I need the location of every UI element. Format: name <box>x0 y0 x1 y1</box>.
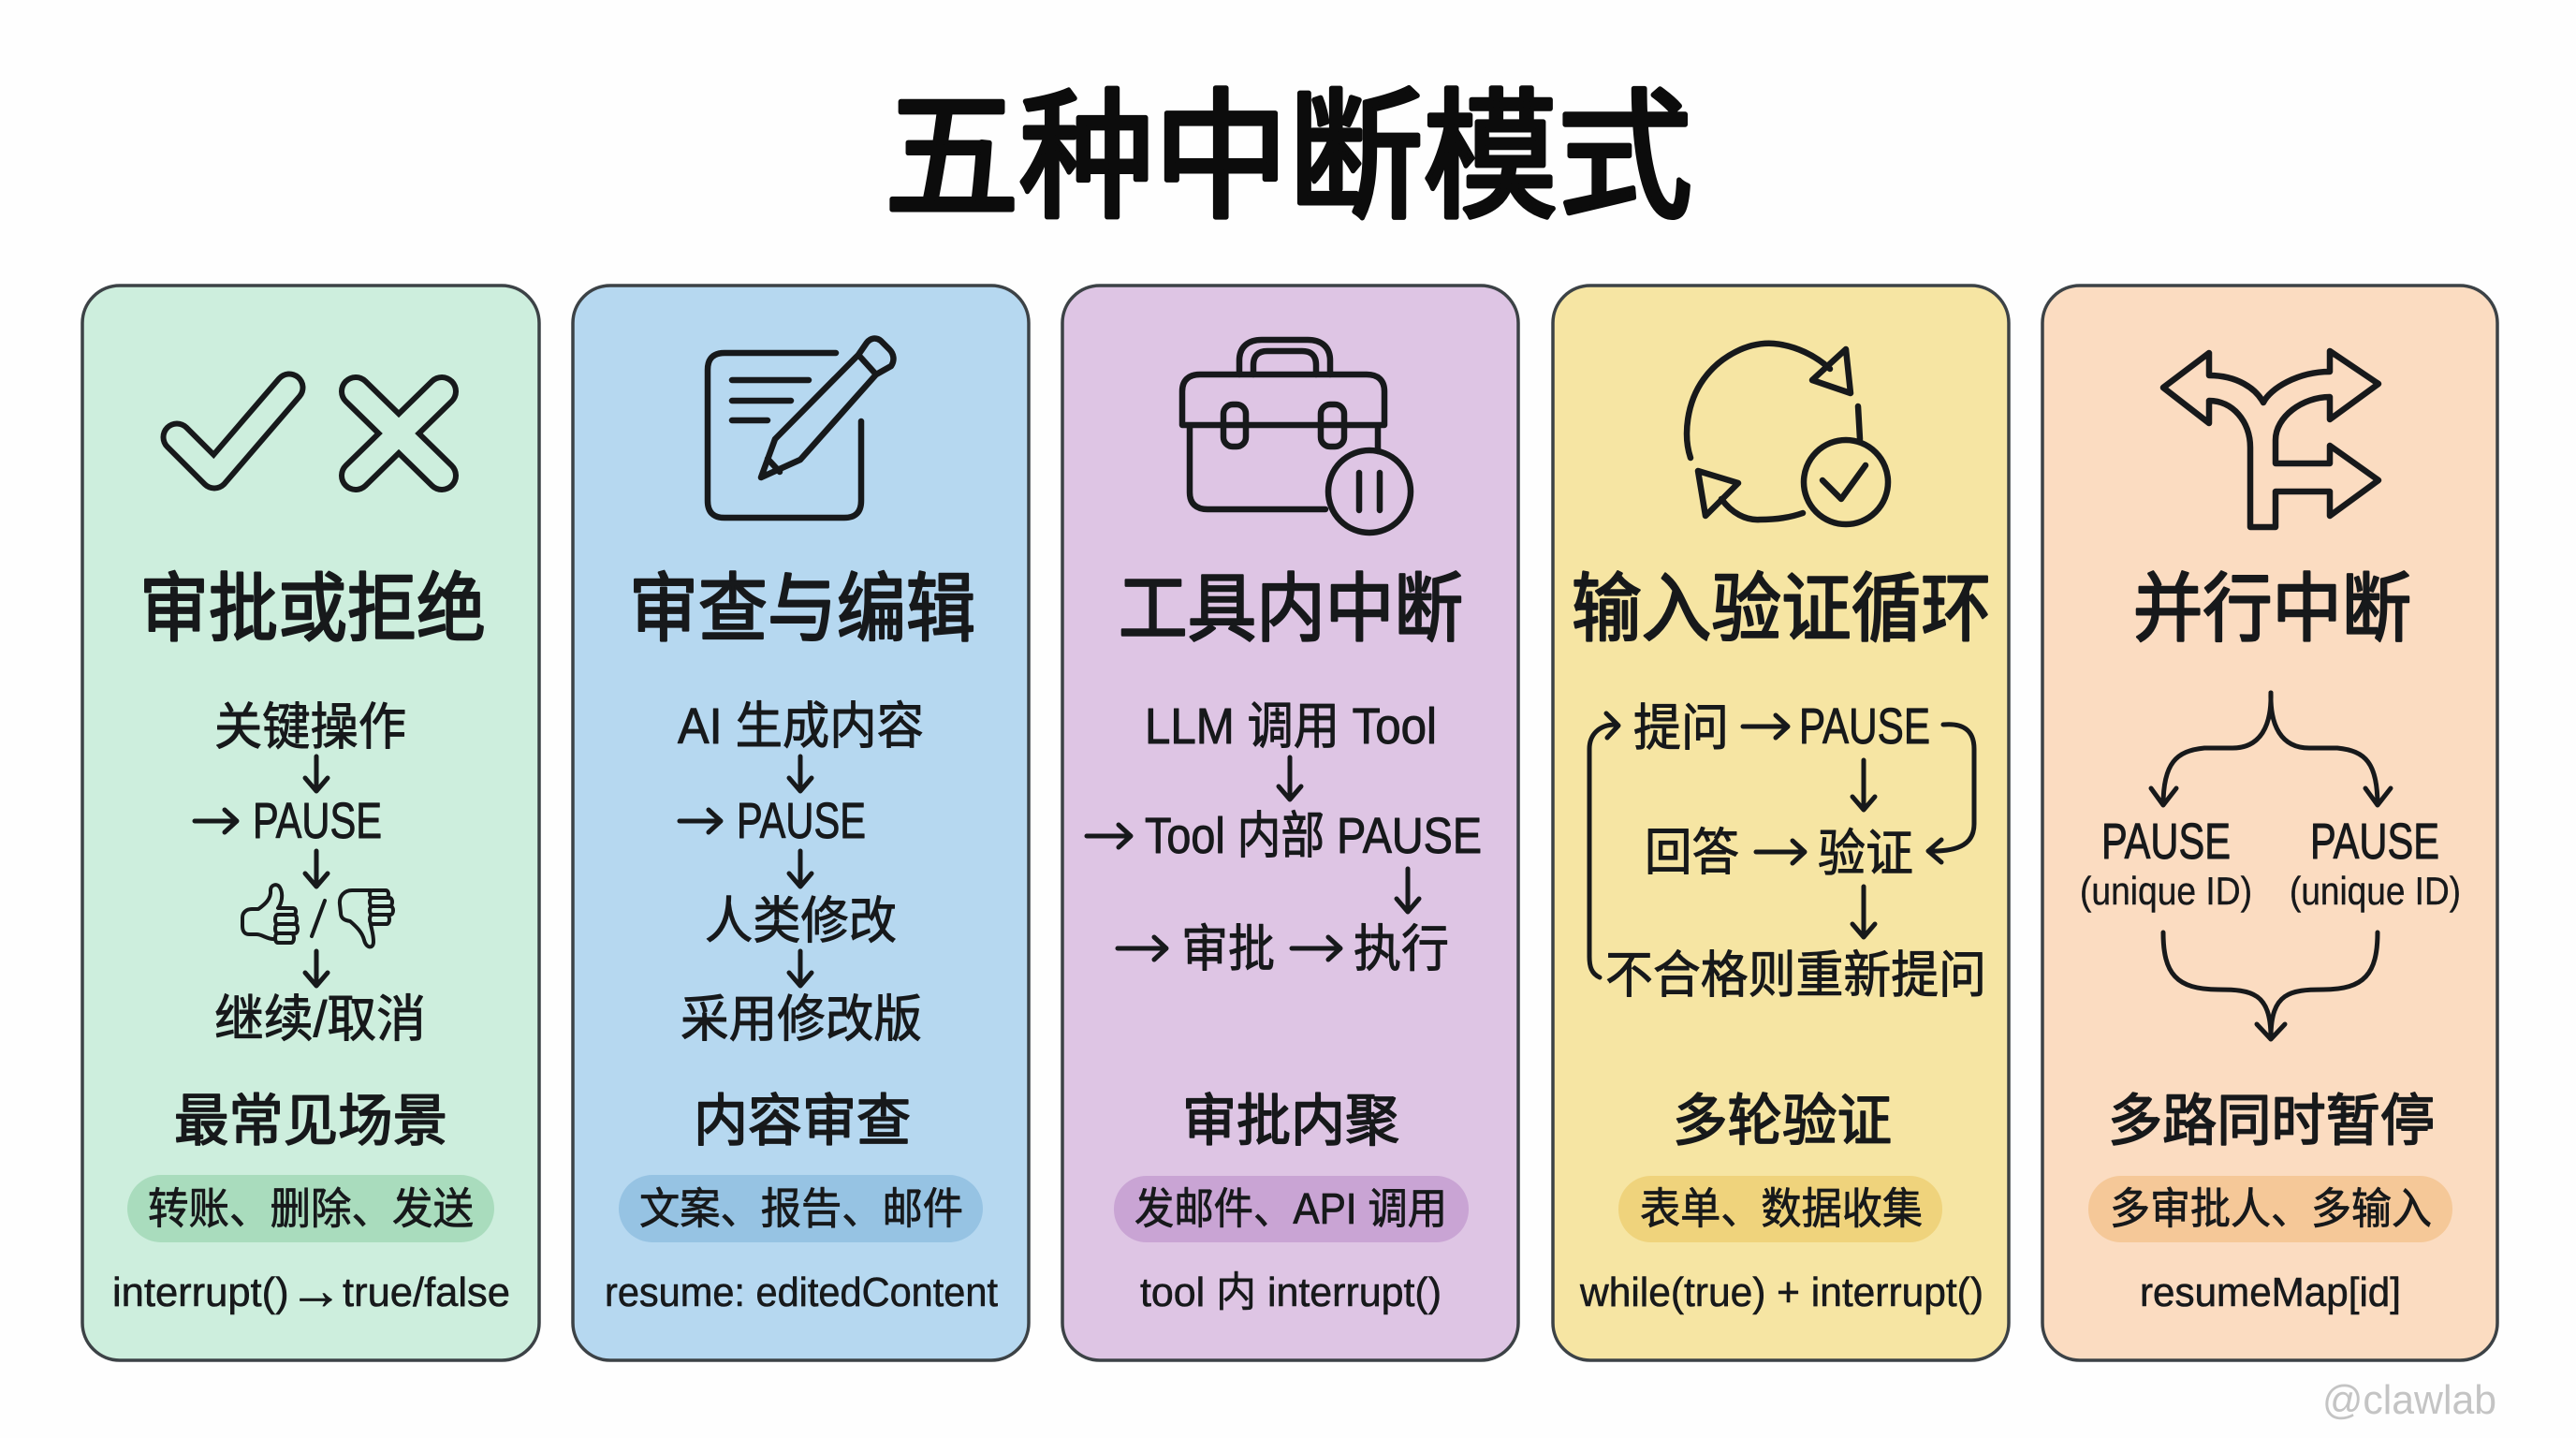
flow: review steps: 采用修改版 <box>681 991 922 1048</box>
flow: tool steps <box>1087 698 1482 977</box>
subheading: 多轮验证 <box>1673 1090 1892 1152</box>
flow: parallel diagram: (unique ID) <box>2080 869 2252 913</box>
flow: loop steps: 提问 <box>1633 700 1729 756</box>
flow: parallel diagram: PAUSE <box>2101 814 2231 870</box>
pill <box>127 1175 494 1242</box>
flow: parallel diagram: (unique ID) <box>2290 869 2461 913</box>
panel: validation loop <box>1553 286 2009 1360</box>
flow: review steps: PAUSE <box>737 793 866 849</box>
pill: 表单、数据收集 <box>1640 1184 1923 1233</box>
flow: tool steps: 审批 <box>1181 921 1275 977</box>
flow: review steps: AI 生成内容 <box>678 698 924 755</box>
flow: tool steps: 执行 <box>1354 921 1449 977</box>
flow: approve steps: 继续/取消 <box>214 991 426 1048</box>
subheading: 内容审查 <box>694 1090 911 1152</box>
flow: approve steps <box>195 699 426 1048</box>
icon: document and pencil <box>708 339 893 518</box>
code: tool 内 interrupt() <box>1140 1269 1442 1315</box>
heading: 审批或拒绝 <box>139 567 486 651</box>
flow: loop steps: 验证 <box>1818 826 1913 882</box>
heading: 输入验证循环 <box>1572 567 1991 651</box>
icon: loop with check <box>1687 344 1888 524</box>
code: interrupt() <box>112 1269 291 1315</box>
pill <box>1618 1176 1942 1242</box>
code: resumeMap[id] <box>2140 1269 2401 1315</box>
pill: 多审批人、多输入 <box>2110 1184 2432 1233</box>
subheading: 审批内聚 <box>1182 1090 1399 1152</box>
watermark: @clawlab <box>2322 1377 2496 1423</box>
icon: branching arrows <box>2163 351 2378 527</box>
flow: loop steps: 不合格则重新提问 <box>1605 947 1986 1004</box>
subheading: 多路同时暂停 <box>2108 1090 2435 1152</box>
flow: parallel diagram: PAUSE <box>2310 814 2439 870</box>
flow: review steps <box>678 698 924 1048</box>
heading: 并行中断 <box>2133 567 2411 651</box>
icon: check and cross <box>177 388 442 476</box>
flow: approve steps: PAUSE <box>253 793 382 849</box>
icon: toolbox with pause <box>1182 340 1411 533</box>
code: → <box>289 1260 343 1321</box>
panel: approve or reject <box>82 286 539 1360</box>
heading: 工具内中断 <box>1119 567 1463 651</box>
subheading: 最常见场景 <box>174 1090 447 1152</box>
flow: approve steps: 关键操作 <box>214 699 406 756</box>
flow: loop steps: 回答 <box>1645 825 1739 881</box>
pill: 文案、报告、邮件 <box>639 1184 963 1233</box>
flow: tool steps: Tool 内部 PAUSE <box>1145 808 1482 864</box>
panel: review and edit <box>573 286 1029 1360</box>
code: resume: editedContent <box>605 1269 998 1315</box>
title: 五种中断模式 <box>885 79 1692 236</box>
heading: 审查与编辑 <box>629 567 975 651</box>
code: true/false <box>343 1269 510 1315</box>
icon: thumbs up and down <box>242 885 393 946</box>
pill <box>2088 1176 2452 1242</box>
flow: loop steps <box>1589 698 1986 1004</box>
pill <box>619 1175 983 1242</box>
pill: 发邮件、API 调用 <box>1134 1184 1447 1233</box>
flow: tool steps: LLM 调用 Tool <box>1145 698 1437 755</box>
flow: parallel diagram <box>2080 693 2461 1039</box>
code: while(true) + interrupt() <box>1579 1269 1983 1315</box>
panel: parallel interrupt <box>2042 286 2497 1360</box>
panel: interrupt inside tool <box>1062 286 1518 1360</box>
flow: review steps: 人类修改 <box>705 893 897 949</box>
pill <box>1114 1176 1469 1242</box>
flow: loop steps: PAUSE <box>1799 698 1930 755</box>
pill: 转账、删除、发送 <box>148 1184 474 1233</box>
